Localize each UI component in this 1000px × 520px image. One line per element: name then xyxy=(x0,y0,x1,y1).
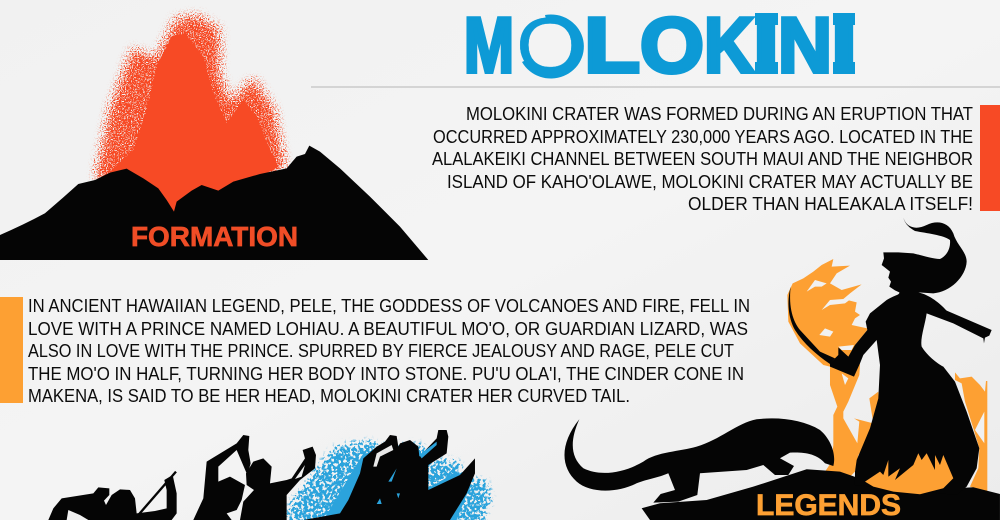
title: O xyxy=(516,1,584,89)
text block: legend: ALSO IN LOVE WITH THE PRINCE. SPURRED BY FIERCE JEALOUSY AND RAGE, PELE CUT xyxy=(28,340,734,361)
eruption plume xyxy=(97,17,283,213)
legends illustration xyxy=(564,218,1000,520)
ground xyxy=(642,469,1000,520)
sword xyxy=(789,287,835,364)
Pele figure xyxy=(830,218,992,495)
title: I xyxy=(831,1,857,89)
text block: legend xyxy=(28,295,750,406)
text block: legend: IN ANCIENT HAWAIIAN LEGEND, PELE, THE GODDESS OF VOLCANOES AND FIRE, FELL IN xyxy=(28,295,750,316)
water splash xyxy=(288,442,490,520)
text block: legend: THE MO'O IN HALF, TURNING HER BODY INTO STONE. PU'U OLA'I, THE CINDER CONE IN xyxy=(28,363,744,384)
text block: legend: LOVE WITH A PRINCE NAMED LOHIAU. A BEAUTIFUL MO'O, OR GUARDIAN LIZARD, WAS xyxy=(28,318,748,339)
mountain silhouette xyxy=(0,146,428,260)
title: K xyxy=(704,1,754,89)
dress hem fire xyxy=(865,453,953,494)
title: N xyxy=(778,1,832,89)
text block: formation xyxy=(432,103,973,214)
paddler group xyxy=(48,435,316,520)
title: I xyxy=(753,1,779,89)
label: Formation: FORMATION xyxy=(131,221,298,252)
title: M xyxy=(464,1,514,89)
flames xyxy=(787,259,987,492)
text block: formation: OLDER THAN HALEAKALA ITSELF! xyxy=(688,193,973,214)
title: O xyxy=(640,1,704,89)
canoe and paddlers xyxy=(303,430,475,520)
paddlers illustration xyxy=(48,430,490,520)
title: L xyxy=(584,1,640,89)
bar: orange accent xyxy=(0,297,23,403)
text block: legend: MAKENA, IS SAID TO BE HER HEAD, MOLOKINI CRATER HER CURVED TAIL. xyxy=(28,385,630,406)
volcano illustration xyxy=(0,17,428,260)
bar: red accent xyxy=(980,105,1000,211)
title xyxy=(311,1,1000,89)
lizard xyxy=(564,418,834,503)
